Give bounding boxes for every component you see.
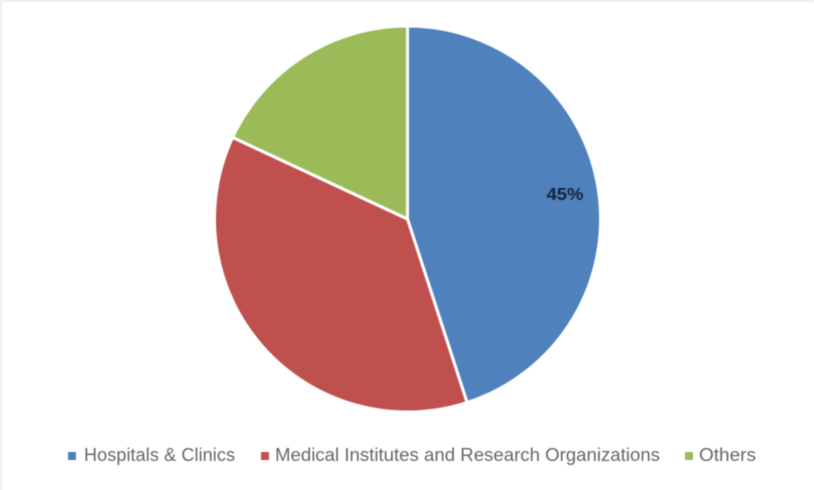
legend item: Medical Institutes and Research Organizations: Medical Institutes and Research Organizations	[275, 445, 660, 465]
pie chart	[214, 26, 601, 412]
slice: Medical Institutes and Research Organizations	[214, 137, 467, 412]
legend item: Hospitals & Clinics: Hospitals & Clinics	[84, 445, 235, 465]
legend item: Others: Others	[699, 445, 756, 465]
slice: Others	[233, 26, 408, 219]
legend	[68, 445, 756, 465]
data label: 45%: 45%	[546, 184, 584, 204]
slice: Hospitals & Clinics 45%	[408, 26, 601, 403]
